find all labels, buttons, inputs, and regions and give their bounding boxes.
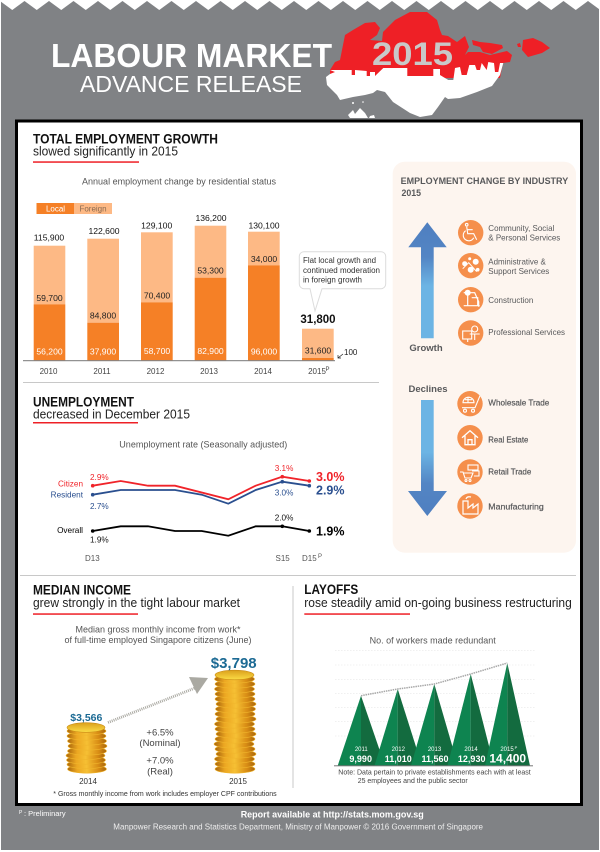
- panel: employment change by industry: 2015: [402, 188, 421, 198]
- triangle chart: layoffs: P: [515, 745, 518, 750]
- panel: employment change by industry: [393, 162, 576, 553]
- bar chart: employment change: 2011: [93, 367, 111, 376]
- line chart: unemployment: 2.9%: [90, 473, 109, 482]
- triangle chart: layoffs: 2011: [355, 747, 368, 753]
- heading: total employment growth: TOTAL EMPLOYMENT GROWTH: [33, 132, 218, 147]
- bar chart: employment change: 2013: [200, 367, 218, 376]
- income labels: [70, 655, 257, 724]
- bar chart: employment change: 56,200: [36, 347, 63, 357]
- income growth figures: (Real): [147, 766, 173, 777]
- panel: employment change by industry: Manufacturing: [488, 502, 544, 512]
- icon: real estate house: [457, 425, 483, 450]
- line chart: unemployment: 1.9%: [316, 524, 344, 538]
- chart title: median income: of full-time employed Singapore citizens (June): [64, 635, 252, 645]
- bar chart: employment change: 34,000: [251, 254, 277, 264]
- credit line: Manpower Research and Statistics Department, Ministry of Manpower © 2016 Government of Singapore: [113, 822, 483, 832]
- line chart: unemployment: 2.9%: [316, 484, 344, 498]
- triangle chart: layoffs: 14,400: [489, 752, 526, 766]
- footnote: preliminary: P: [19, 810, 23, 816]
- triangle chart: layoffs: 9,990: [349, 754, 372, 764]
- bar chart: employment change: 100: [344, 348, 358, 357]
- bar chart: employment change: 84,800: [90, 310, 116, 320]
- bar chart: employment change: 2012: [147, 367, 165, 376]
- panel: employment change by industry: & Personal Services: [488, 232, 560, 242]
- bar chart: employment change: 129,100: [141, 220, 172, 230]
- triangle chart: layoffs: 2014: [464, 747, 478, 753]
- coin year labels: 2014: [79, 777, 97, 786]
- chart title: annual employment: Annual employment change by residential status: [82, 177, 276, 187]
- bar chart: employment change: 58,700: [144, 346, 170, 356]
- icon: manufacturing factory: [457, 493, 483, 519]
- bar chart: employment change: 53,300: [197, 266, 224, 276]
- map of Singapore: [326, 12, 550, 118]
- callout: Flat local growth and: [303, 256, 376, 265]
- heading: median income: grew strongly in the tight labour market: [33, 596, 240, 610]
- footnote: preliminary: : Preliminary: [24, 809, 66, 818]
- panel: employment change by industry: Real Estate: [488, 434, 529, 444]
- divider lines: [20, 382, 576, 788]
- line chart: unemployment: 1.9%: [90, 536, 109, 545]
- bar chart: employment change: 31,600: [305, 346, 331, 356]
- report link: Report available at http://stats.mom.gov.sg: [241, 810, 424, 820]
- income growth figures: [139, 728, 181, 777]
- panel: employment change by industry: Wholesale Trade: [488, 397, 550, 407]
- triangle chart: layoffs: 12,930: [458, 754, 485, 764]
- icon: wholesale trolley: [457, 391, 483, 416]
- income growth figures: (Nominal): [139, 738, 181, 749]
- bar chart: employment change: 96,000: [251, 347, 277, 357]
- heading: layoffs: rose steadily amid on-going business restructuring: [304, 596, 572, 610]
- heading: unemployment: [33, 394, 190, 424]
- income labels: $3,566: [70, 712, 103, 724]
- icon: wheelchair: [458, 220, 483, 245]
- line chart: unemployment: Resident: [51, 491, 84, 500]
- triangle chart: layoffs: 2012: [392, 747, 406, 753]
- line chart: unemployment: 3.0%: [275, 488, 293, 497]
- line chart: unemployment: 2.7%: [90, 502, 109, 511]
- callout: in foreign growth: [303, 276, 362, 285]
- main panel: [16, 121, 582, 804]
- line chart: unemployment: 3.1%: [275, 464, 293, 473]
- chart title: unemployment rate: Unemployment rate (Seasonally adjusted): [119, 439, 287, 449]
- bar chart: employment change: 2015: [308, 367, 326, 376]
- heading: unemployment: UNEMPLOYMENT: [33, 394, 135, 409]
- bar chart: employment change: P: [325, 367, 330, 373]
- panel: employment change by industry: Administrative &: [488, 256, 546, 266]
- bar chart: employment change: 2014: [254, 367, 272, 376]
- footnote: income: * Gross monthly income from work includes employer CPF contributions: [53, 789, 277, 798]
- coin stack 2015: [214, 670, 256, 773]
- icon: professional: [458, 320, 483, 346]
- bar chart: employment change: 2010: [40, 367, 58, 376]
- panel: employment change by industry: Support Services: [488, 266, 549, 276]
- coin stack 2014: [66, 723, 107, 773]
- line chart: unemployment: [51, 464, 344, 563]
- line chart: unemployment: Citizen: [58, 480, 83, 489]
- income growth figures: +7.0%: [146, 756, 174, 767]
- title: ADVANCE RELEASE: [80, 71, 302, 97]
- income growth figures: +6.5%: [146, 728, 174, 739]
- bar chart: employment change: [23, 213, 358, 376]
- bar chart: employment change: 122,600: [88, 226, 120, 236]
- line chart: unemployment: 2.0%: [275, 514, 293, 523]
- bar chart: employment change: 59,700: [36, 293, 63, 303]
- bar chart: employment change: 70,400: [144, 290, 170, 300]
- line chart: unemployment: S15: [276, 554, 290, 563]
- title: [51, 38, 333, 97]
- legend: [36, 203, 112, 214]
- panel: employment change by industry: Retail Trade: [488, 467, 532, 477]
- bar chart: employment change: 130,100: [248, 221, 280, 231]
- heading: median income: MEDIAN INCOME: [33, 582, 131, 597]
- bar chart: employment change: 31,800: [300, 314, 336, 326]
- line chart: unemployment: D15: [302, 554, 317, 563]
- title: LABOUR MARKET: [51, 38, 333, 75]
- bar chart: employment change: 82,900: [197, 346, 224, 356]
- bar chart: employment change: 37,900: [90, 347, 116, 357]
- icon: construction: [458, 287, 483, 312]
- legend: Foreign: [79, 204, 107, 214]
- heading: total employment growth: slowed significantly in 2015: [33, 145, 178, 159]
- income labels: $3,798: [211, 655, 257, 672]
- heading: median income: [33, 582, 240, 615]
- chart title: median income: Median gross monthly income from work*: [75, 624, 241, 634]
- chart title: workers made redundant: No. of workers made redundant: [370, 636, 496, 646]
- year label: 2015: [372, 36, 453, 72]
- coin year labels: [79, 777, 247, 786]
- arrow: income growth: [108, 677, 208, 722]
- heading: total employment growth: [33, 132, 218, 163]
- panel: employment change by industry: Community, Social: [488, 223, 554, 233]
- panel: employment change by industry: Growth: [409, 343, 443, 354]
- panel: employment change by industry: Construction: [488, 295, 534, 305]
- callout: [299, 252, 386, 311]
- note: layoffs: 25 employees and the public sector: [358, 776, 468, 785]
- heading: unemployment: decreased in December 2015: [33, 407, 190, 421]
- icon: administrative: [458, 253, 483, 278]
- triangle chart: layoffs: 11,010: [385, 754, 412, 764]
- line chart: unemployment: 3.0%: [316, 470, 344, 484]
- line chart: unemployment: D13: [85, 554, 100, 563]
- note: layoffs: Note: Data pertain to private establishments each with at least: [338, 767, 531, 776]
- triangle chart: layoffs: 2015: [500, 747, 514, 753]
- coin year labels: 2015: [229, 777, 247, 786]
- legend: Local: [46, 204, 65, 214]
- triangle chart: layoffs: [334, 651, 535, 766]
- triangle chart: layoffs: 2013: [428, 747, 442, 753]
- heading: layoffs: LAYOFFS: [304, 582, 358, 597]
- line chart: unemployment: Overall: [57, 526, 83, 535]
- bar chart: employment change: 136,200: [195, 213, 227, 223]
- line chart: unemployment: P: [318, 554, 322, 560]
- note: layoffs: [338, 767, 531, 785]
- icon: retail cart: [457, 459, 483, 485]
- callout: continued moderation: [303, 266, 380, 275]
- bar chart: employment change: 115,900: [34, 233, 64, 243]
- heading: layoffs: [304, 582, 572, 615]
- panel: employment change by industry: EMPLOYMENT CHANGE BY INDUSTRY: [401, 176, 568, 186]
- triangle chart: layoffs: 11,560: [421, 754, 449, 764]
- panel: employment change by industry: Declines: [408, 384, 448, 395]
- chart title: median income: [64, 624, 252, 645]
- panel: employment change by industry: Professional Services: [488, 327, 565, 337]
